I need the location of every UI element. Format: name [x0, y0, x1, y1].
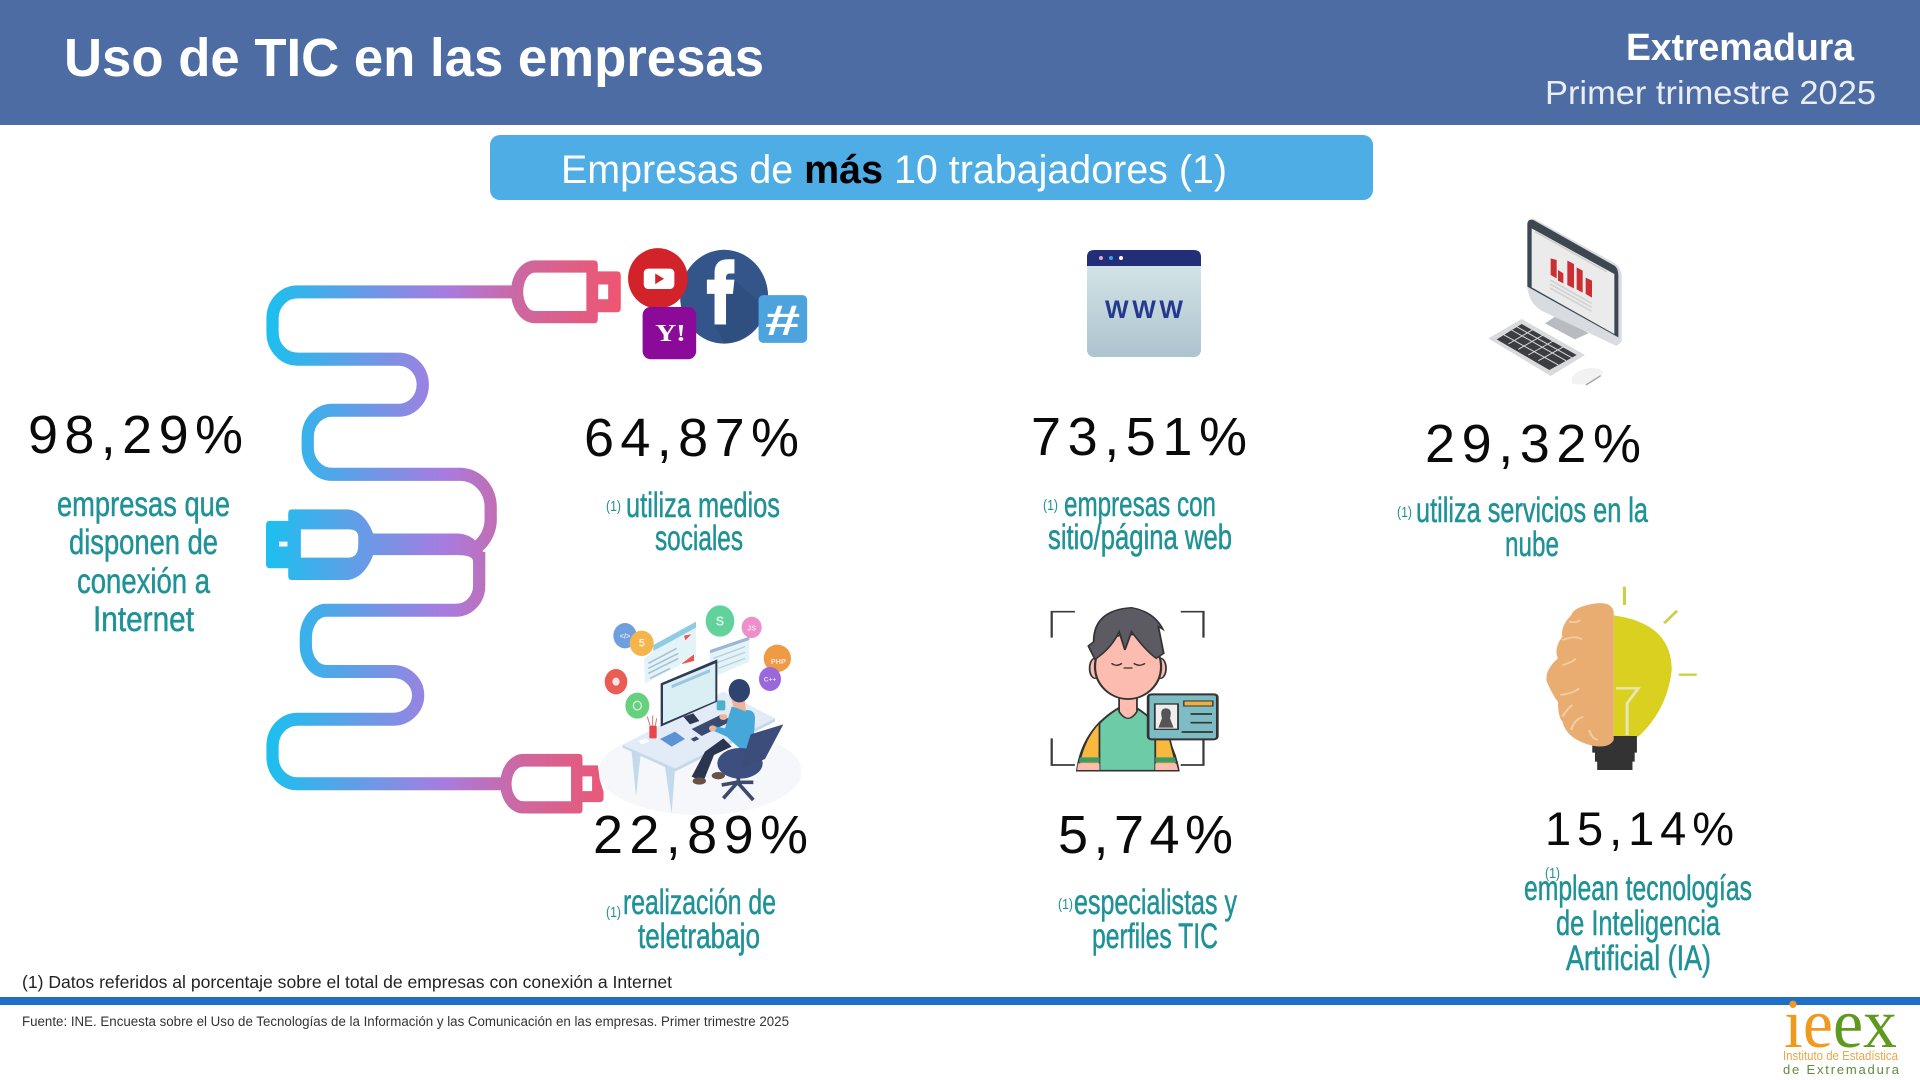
stat: connection: [28, 405, 243, 639]
stat: cloud: 29,32%: [1425, 414, 1641, 474]
stat: ICT specialists: perfiles TIC: [1092, 917, 1218, 956]
stat: social media: [584, 408, 799, 558]
stat: artificial intelligence: [1524, 802, 1752, 978]
logo: ieex: de Extremadura: [1783, 1062, 1900, 1077]
stat: artificial intelligence: (1): [1545, 865, 1560, 882]
stat: connection: 98,29%: [28, 405, 243, 465]
stat: remote work: (1): [606, 904, 621, 921]
icon: desktop computer: [1488, 218, 1622, 385]
stat: remote work: realización de: [623, 883, 776, 922]
stat: website: [1031, 407, 1247, 557]
stat: website: 73,51%: [1031, 407, 1247, 467]
stat: cloud: (1): [1397, 504, 1412, 521]
icon: social media: #: [765, 296, 800, 344]
stat: artificial intelligence: de Inteligencia: [1556, 904, 1720, 943]
stat: remote work: 22,89%: [593, 805, 808, 865]
banner: [490, 135, 1373, 200]
stat: ICT specialists: (1): [1058, 896, 1073, 913]
banner: Empresas de más 10 trabajadores (1): [561, 148, 1227, 192]
icon: remote work illustration: 5: [639, 638, 645, 650]
stat: ICT specialists: [1058, 805, 1237, 956]
footnote: (1) Datos referidos al porcentaje sobre el total de empresas con conexión a Internet: [22, 972, 672, 992]
stat: ICT specialists: especialistas y: [1074, 883, 1237, 922]
stat: remote work: teletrabajo: [638, 917, 760, 956]
logo: ieex: ieex: [1784, 986, 1897, 1063]
stat: remote work: [593, 805, 808, 956]
period label: Primer trimestre 2025: [1545, 74, 1876, 111]
stat: website: (1): [1043, 497, 1058, 514]
stat: connection: conexión a: [77, 562, 210, 601]
icon: brain light bulb: [1546, 587, 1697, 770]
top plug: [511, 260, 621, 323]
source: Fuente: INE. Encuesta sobre el Uso de Tecnologías de la Información y las Comunicación en las empresas. Primer trimestre 2025: [22, 1014, 789, 1029]
icon: remote work illustration: [598, 605, 802, 815]
header band: [0, 0, 1920, 125]
stat: social media: 64,87%: [584, 408, 799, 468]
icon: www browser window: WWW: [1105, 296, 1183, 324]
stat: connection: empresas que: [57, 485, 230, 524]
usb cables: [266, 260, 621, 814]
icon: remote work illustration: C++: [764, 677, 776, 684]
stat: connection: disponen de: [69, 523, 218, 562]
stat: social media: utiliza medios: [626, 486, 780, 525]
stat: artificial intelligence: emplean tecnologías: [1524, 869, 1752, 908]
icon: www browser window: [1087, 250, 1201, 357]
icon: remote work illustration: S: [716, 615, 724, 629]
stat: connection: Internet: [93, 600, 194, 639]
title: Uso de TIC en las empresas: [64, 28, 764, 88]
icon: social media: [628, 248, 807, 359]
stat: cloud: utiliza servicios en la: [1416, 491, 1648, 530]
stat: social media: (1): [606, 498, 621, 515]
stat: website: empresas con: [1064, 485, 1216, 524]
region label: Extremadura: [1626, 27, 1855, 69]
stat: cloud: [1397, 414, 1648, 564]
stat: ICT specialists: 5,74%: [1058, 805, 1233, 865]
stat: cloud: nube: [1505, 525, 1559, 564]
icon: social media: Y!: [655, 320, 686, 347]
stat: artificial intelligence: Artificial (IA): [1566, 939, 1711, 978]
stat: social media: sociales: [655, 519, 743, 558]
icon: remote work illustration: PHP: [771, 657, 786, 666]
icon: person with id card: [1052, 608, 1217, 771]
bottom plug: [500, 754, 604, 814]
icon: remote work illustration: JS: [747, 623, 756, 632]
stat: website: sitio/página web: [1048, 518, 1232, 557]
middle plug: [266, 509, 373, 580]
icon: remote work illustration: </>: [620, 631, 630, 640]
logo: ieex: Instituto de Estadística: [1783, 1048, 1899, 1063]
stat: artificial intelligence: 15,14%: [1545, 802, 1734, 855]
